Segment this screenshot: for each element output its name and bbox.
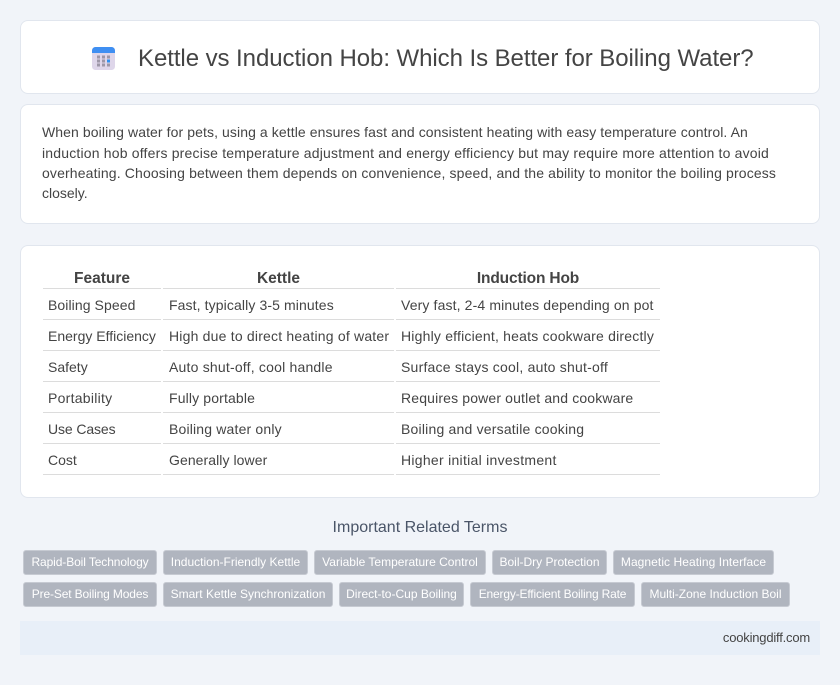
comparison table: High due to direct heating of water (169, 328, 389, 344)
intro paragraph: overheating. Choosing between them depends on convenience, speed, and the ability to monitor the boiling process (42, 165, 776, 181)
tag list: related terms: Magnetic Heating Interface (621, 555, 766, 569)
comparison table: Fast, typically 3-5 minutes (169, 297, 334, 313)
comparison table: Boiling Speed (48, 297, 135, 313)
comparison table: Use Cases (48, 421, 115, 437)
intro paragraph: closely. (42, 185, 88, 201)
comparison table: Very fast, 2-4 minutes depending on pot (401, 297, 654, 313)
footer bar (20, 621, 820, 655)
tag list: related terms: Pre-Set Boiling Modes (32, 587, 148, 601)
comparison table: Fully portable (169, 390, 255, 406)
footer source text: cookingdiff.com (723, 630, 810, 645)
title: Kettle vs Induction Hob: Which Is Better for Boiling Water? (138, 45, 754, 72)
comparison table: Higher initial investment (401, 452, 557, 468)
comparison table: Auto shut-off, cool handle (169, 359, 333, 375)
comparison table: Energy Efficiency (48, 328, 156, 344)
comparison table: Feature (74, 270, 130, 286)
tag list: related terms: Direct-to-Cup Boiling (346, 587, 457, 601)
tag list: related terms: Variable Temperature Control (322, 555, 478, 569)
comparison table: Generally lower (169, 452, 267, 468)
comparison table: Requires power outlet and cookware (401, 390, 633, 406)
tag list: related terms: Energy-Efficient Boiling Rate (479, 587, 626, 601)
comparison table (43, 270, 660, 475)
tag list: related terms: Smart Kettle Synchronization (171, 587, 325, 601)
comparison table: Boiling water only (169, 421, 282, 437)
comparison table: Highly efficient, heats cookware directly (401, 328, 654, 344)
comparison table: Induction Hob (477, 270, 579, 286)
panel: introduction text (20, 104, 820, 224)
tag list: related terms: Multi-Zone Induction Boil (649, 587, 782, 601)
panel: header (20, 20, 820, 94)
comparison table: Boiling and versatile cooking (401, 421, 584, 437)
comparison table: Safety (48, 359, 88, 375)
tag list: related terms: Induction-Friendly Kettle (171, 555, 300, 569)
comparison table: Cost (48, 452, 77, 468)
tag list: related terms: Boil-Dry Protection (499, 555, 600, 569)
intro paragraph: When boiling water for pets, using a kettle ensures fast and consistent heating with easy temperature control. An (42, 124, 748, 140)
tag list: related terms (23, 550, 790, 607)
heading: related terms: Important Related Terms (333, 519, 507, 536)
intro paragraph (42, 124, 776, 201)
comparison table: Kettle (257, 270, 300, 286)
icon: calendar (92, 47, 115, 70)
tag list: related terms: Rapid-Boil Technology (31, 555, 149, 569)
panel: comparison table (20, 245, 820, 498)
comparison table: Surface stays cool, auto shut-off (401, 359, 608, 375)
comparison table: Portability (48, 390, 112, 406)
intro paragraph: induction hob offers precise temperature adjustment and energy efficiency but may require more attention to avoid (42, 145, 769, 161)
